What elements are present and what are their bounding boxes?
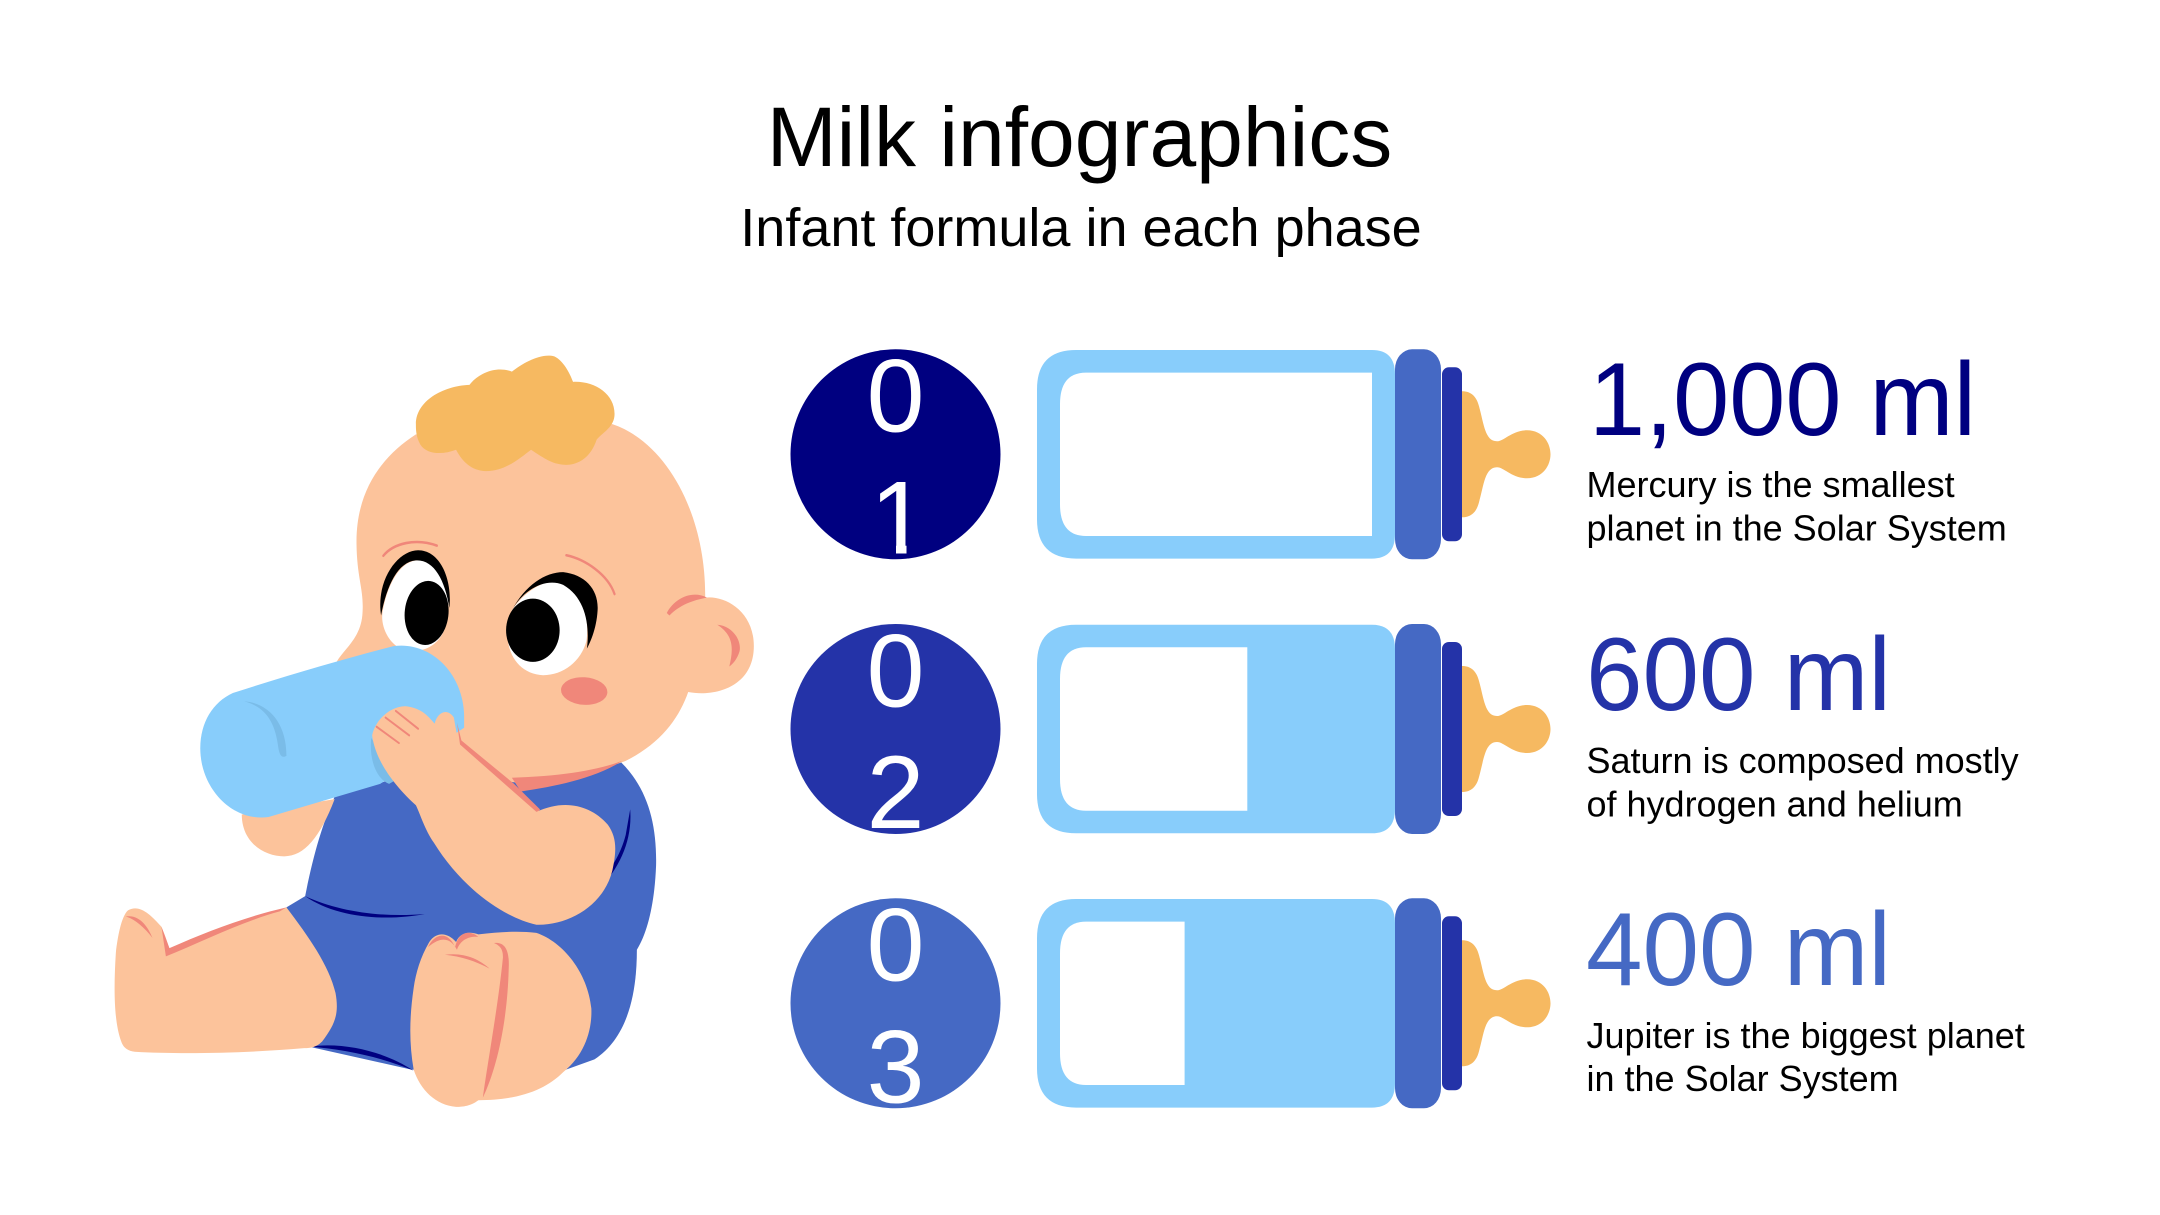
body folds	[305, 809, 630, 1071]
hair	[416, 356, 615, 471]
description 2: of hydrogen and helium	[1586, 784, 1963, 824]
description 2: Saturn is composed mostly	[1586, 740, 2019, 781]
subtitle: Infant formula in each phase	[740, 198, 1422, 258]
blush	[560, 676, 608, 706]
number badge 01: 1	[870, 460, 928, 576]
title: Milk infographics	[767, 90, 1392, 184]
left eye	[380, 550, 452, 651]
neck crease	[512, 761, 622, 792]
far arm	[242, 799, 335, 856]
eyebrows	[383, 542, 615, 594]
arm crease	[457, 723, 540, 816]
row 2	[790, 613, 2019, 851]
row 1	[790, 349, 2004, 560]
description 3: Jupiter is the biggest planet	[1586, 1015, 2025, 1056]
extended leg	[115, 907, 337, 1053]
baby bottle	[200, 646, 464, 818]
description 3: in the Solar System	[1586, 1058, 1899, 1099]
bent leg and foot	[410, 932, 591, 1107]
amount 1: 1,000 ml	[1589, 342, 1976, 458]
amount 3: 400 ml	[1586, 892, 1891, 1008]
description 1: planet in the Solar System	[1586, 508, 2007, 548]
number badge 03: 3	[867, 1009, 924, 1125]
number badge 02: 0	[867, 613, 924, 729]
finger lines	[377, 711, 418, 743]
foot creases	[428, 933, 509, 1098]
number badge 01	[790, 349, 1000, 560]
description 1: Mercury is the smallest	[1586, 464, 1955, 505]
illustration: baby drinking from bottle	[115, 356, 754, 1107]
number badge 02: 2	[867, 735, 924, 851]
bottle gauge 1	[1037, 349, 1550, 559]
row 3	[790, 888, 2025, 1125]
number badge 03: 0	[867, 888, 924, 1004]
number badge 02	[790, 613, 1000, 851]
leg crease	[126, 907, 286, 956]
baby body	[286, 762, 656, 1071]
number badge 03	[790, 888, 1000, 1125]
ear details	[667, 595, 740, 667]
amount 2: 600 ml	[1586, 617, 1891, 733]
bottle gauge 2	[1037, 624, 1550, 834]
near arm and hand	[372, 706, 615, 925]
head	[337, 424, 754, 783]
right eye	[506, 572, 598, 675]
number badge 01: 0	[867, 339, 924, 455]
bottle gauge 3	[1037, 898, 1550, 1108]
